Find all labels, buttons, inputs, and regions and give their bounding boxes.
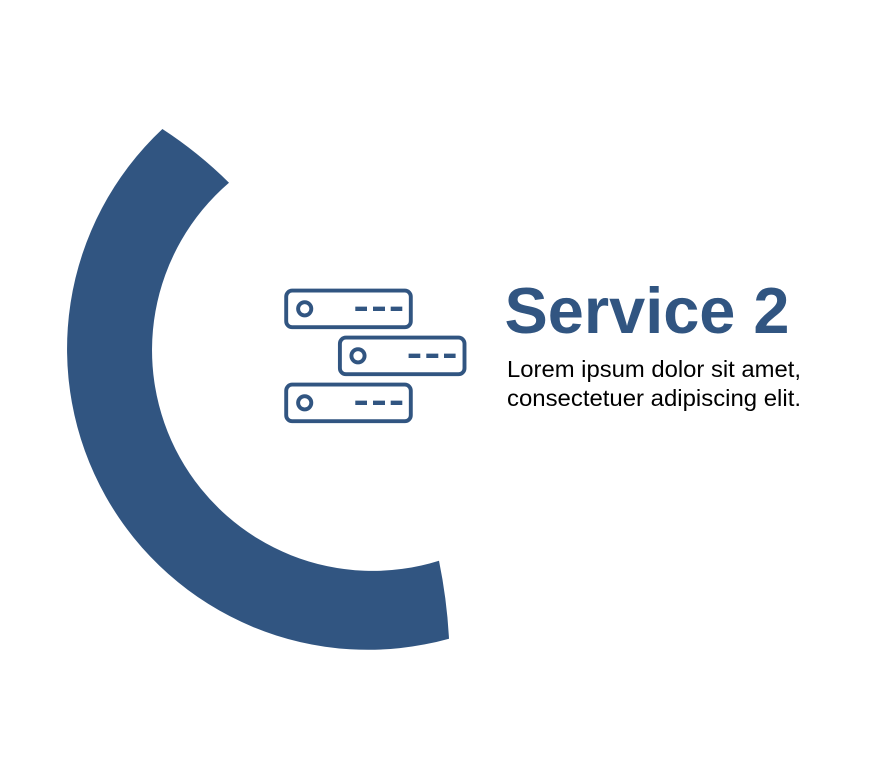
heading: Service 2 bbox=[504, 275, 790, 347]
description text bbox=[507, 356, 801, 411]
description text: Lorem ipsum dolor sit amet, bbox=[507, 356, 801, 382]
description text: consectetuer adipiscing elit. bbox=[507, 385, 801, 411]
icon: servers bbox=[286, 291, 464, 421]
ring segment bbox=[67, 129, 449, 650]
